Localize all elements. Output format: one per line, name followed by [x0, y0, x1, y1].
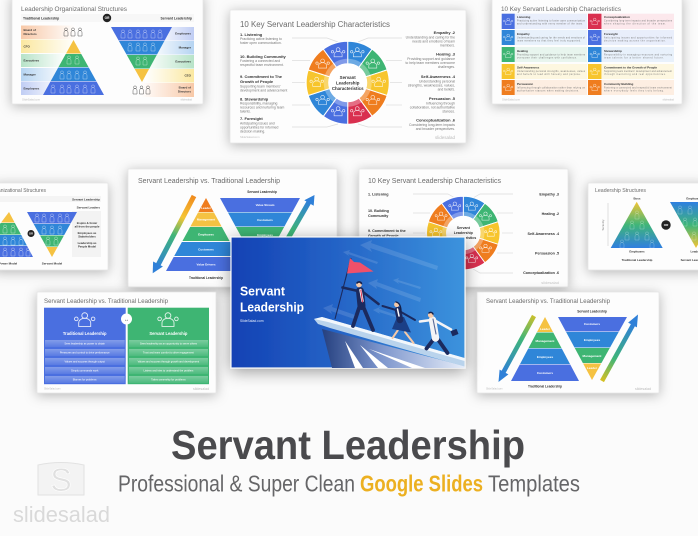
- servant pyramid people: [121, 30, 162, 65]
- slide title: 10 Key Servant Leadership Characteristics: [501, 6, 621, 13]
- traditional pyramid: [511, 317, 579, 381]
- right labels: Empathy .3: [539, 192, 559, 196]
- right arrow: [268, 195, 314, 273]
- servant rows: Values and success through growth and development: [138, 360, 199, 364]
- footer: SlideSalad.com: [44, 388, 61, 390]
- icon: team group: [158, 313, 178, 326]
- right labels: Self-Awareness .4: [528, 232, 560, 236]
- left column rows: Empathy: [517, 32, 530, 36]
- panel: leadership structures slide (middle right, cropped): [588, 183, 698, 270]
- servant rows: [129, 340, 208, 383]
- left characteristics: resources and nurturing team: [240, 106, 284, 110]
- servant pyramid labels: Value Stream: [256, 203, 275, 207]
- right arrow: [602, 314, 638, 381]
- traditional pyramid labels: Employees: [198, 232, 214, 236]
- left column rows: Practicing active listening to foster open communication: [517, 20, 586, 22]
- traditional rows: Sees leadership as power to obtain: [64, 342, 106, 346]
- footer: [240, 135, 455, 140]
- notes panel: Inspire & foster: [77, 221, 98, 225]
- right column rows: Responsibility in managing resources and nurturing: [604, 54, 673, 56]
- servant rows: Trust and team comfort to drive engagement: [143, 350, 194, 354]
- right column rows: when shaping the direction of the team.: [604, 22, 666, 26]
- background arrows: [323, 240, 438, 320]
- traditional pyramid labels: Customers: [537, 371, 553, 375]
- cliff slab: [314, 317, 464, 366]
- notes panel: People Model: [78, 244, 96, 248]
- left characteristics: talents.: [240, 110, 251, 114]
- hero illustration: [314, 240, 464, 368]
- left characteristics: Growth of People: [240, 79, 274, 84]
- servant pyramid: [555, 317, 630, 380]
- donut chart: [422, 191, 505, 275]
- right rows: [140, 27, 194, 97]
- right column rows: decision making across the organization.: [604, 40, 666, 42]
- right column rows: through mentoring and real opportunities.: [604, 73, 666, 76]
- right column rows: [588, 14, 674, 95]
- panel: two column comparison slide (lower left): [37, 292, 216, 393]
- slide title: Servant Leadership vs. Traditional Leadership: [44, 298, 168, 305]
- left column rows: [502, 14, 587, 95]
- left characteristics: Practicing active listening to: [240, 37, 282, 41]
- donut centre label: Leadership: [336, 80, 360, 86]
- traditional heading: Traditional Leadership: [63, 331, 107, 336]
- left characteristics: 9. Commitment to The: [240, 74, 283, 79]
- right column rows: Considering long-term impacts and broader perspectives: [604, 20, 673, 22]
- connector lines: [292, 38, 402, 127]
- right characteristics: Providing support and guidance: [407, 57, 455, 61]
- OR badge: OR: [29, 232, 33, 236]
- left column rows: Providing support and guidance to help team members: [517, 54, 586, 56]
- right characteristics: Conceptualization .6: [416, 118, 456, 122]
- labels: Boss: [633, 196, 641, 200]
- slide title: Servant Leadership vs. Traditional Leadership: [138, 178, 280, 185]
- right characteristics: Self-Awareness .4: [421, 74, 456, 79]
- servant pyramid labels: Employees: [257, 233, 273, 237]
- traditional rows: Simply commands work: [71, 368, 99, 372]
- left labels: [368, 192, 406, 238]
- right column rows: Fostering a connected and respectful team environment: [604, 86, 672, 90]
- traditional pyramid labels: Employees: [537, 355, 553, 359]
- slide title: Leadership Organizational Structures: [21, 6, 127, 13]
- footer: SlideSalad.com: [22, 98, 40, 102]
- left characteristics: opportunities for informed: [240, 126, 279, 130]
- servant rows: Listens and tries to understand the problem: [143, 368, 193, 372]
- footer: [44, 387, 209, 391]
- hero title: [240, 284, 304, 314]
- left pyramid: [0, 212, 33, 257]
- traditional pyramid labels: [536, 327, 554, 375]
- right characteristics: Understanding and caring for the: [406, 36, 455, 40]
- slide title: 10 Key Servant Leadership Characteristics: [368, 178, 501, 185]
- traditional rows: Blames for problems: [73, 378, 97, 382]
- donut centre label: Servant: [457, 226, 471, 230]
- left labels: 9. Commitment to the: [368, 229, 406, 233]
- footer: SlideSalad.com: [240, 135, 260, 139]
- left column rows: Healing: [517, 49, 528, 53]
- traditional rows: Values and success through output: [65, 360, 105, 364]
- panel: servant vs traditional slide (lower right): [477, 292, 659, 393]
- right column rows: Foresight: [604, 32, 618, 36]
- board icons: [64, 28, 150, 94]
- footer: slidesalad: [435, 135, 455, 140]
- footer: slidesalad: [635, 387, 651, 391]
- donut centre label: Characteristics: [332, 86, 364, 91]
- right column rows: Supporting team members' development and advancement: [604, 70, 672, 73]
- right characteristics: and broader perspectives.: [416, 127, 455, 131]
- footer: SlideSalad.com: [502, 98, 520, 102]
- left characteristics: 8. Stewardship: [240, 96, 269, 102]
- left labels: 10. Building: [368, 209, 389, 213]
- left column rows: Understanding and caring for the needs and emotions of: [517, 36, 585, 40]
- subtitle: [118, 470, 580, 496]
- slide title: 10 Key Servant Leadership Characteristics: [240, 20, 390, 29]
- donut centre label: Servant: [340, 75, 356, 80]
- right column rows: Conceptualization: [604, 15, 630, 19]
- subtitle: Templates: [488, 470, 580, 496]
- right column rows: Commitment to the Growth of People: [604, 66, 657, 70]
- notes panel: Stakeholders: [78, 234, 96, 238]
- right characteristics: challenges.: [438, 65, 455, 69]
- right characteristics: Empathy .2: [434, 30, 456, 35]
- right characteristics: collaboration, not authoritative: [410, 106, 455, 110]
- OR badge: OR: [105, 16, 110, 20]
- hero title: Leadership: [240, 300, 304, 314]
- model labels: [0, 262, 62, 266]
- right characteristics: Understanding personal: [419, 80, 455, 84]
- panel: characteristics table slide (top right): [492, 0, 682, 104]
- traditional pyramid: [166, 198, 230, 271]
- traditional rows: Pressures and control to drive performance: [60, 350, 110, 354]
- left characteristics: Supporting team members': [240, 84, 281, 88]
- panel: leadership organizational structures slide (top left): [12, 0, 203, 104]
- traditional pyramid: [43, 40, 104, 95]
- footer: [22, 98, 193, 102]
- left column rows: Self-Awareness: [517, 66, 540, 70]
- donut centre label: [332, 75, 364, 91]
- traditional pyramid labels: Customers: [198, 248, 214, 252]
- traditional pyramid people: [51, 56, 95, 93]
- panel: hero cover slide: [231, 237, 465, 368]
- left rows: CFO: [24, 44, 30, 48]
- right characteristics: stances.: [442, 110, 455, 114]
- right column rows: Anticipating issues and opportunities for informed: [604, 36, 673, 40]
- right column rows: Stewardship: [604, 49, 622, 53]
- left column rows: Listening: [517, 15, 531, 19]
- connector lines: [413, 194, 513, 273]
- left column rows: overcome their challenges with confidence.: [517, 56, 577, 60]
- panel: 10 key characteristics slide (top centre): [230, 10, 466, 143]
- right labels: Healing .2: [542, 212, 559, 216]
- donut centre label: [450, 226, 476, 240]
- traditional column: [44, 308, 126, 384]
- footer: slidesalad: [662, 98, 675, 102]
- flag: [335, 258, 374, 319]
- right characteristics: and beliefs.: [438, 88, 455, 92]
- right characteristics: strengths, weaknesses, values,: [408, 84, 455, 88]
- slide title: Servant Leadership vs. Traditional Leadership: [486, 298, 610, 305]
- footer mark: slidesalad: [541, 280, 559, 285]
- footer: slidesalad: [193, 387, 209, 391]
- left column rows: and understanding with every member of the team.: [517, 22, 583, 26]
- left column rows: and beliefs to lead with honesty and purpose.: [517, 73, 581, 76]
- cliff rock: [322, 329, 464, 368]
- footer: slidesalad: [180, 98, 193, 102]
- right labels: Conceptualization .6: [523, 271, 559, 275]
- notes panel: Leadership as: [78, 241, 97, 245]
- right column rows: Community Building: [604, 82, 633, 86]
- left characteristics: Anticipating issues and: [240, 122, 275, 126]
- hero title: Servant: [240, 284, 286, 298]
- notes panel: Employees as: [78, 231, 97, 235]
- axis labels: [528, 310, 607, 388]
- logo: slidesalad: [13, 462, 110, 527]
- slide title: Leadership Structures: [595, 188, 647, 194]
- OR badge: OR: [664, 223, 669, 227]
- left rows: Directors: [24, 32, 37, 36]
- OR badge: [28, 230, 34, 237]
- servant rows: Takes ownership for problems: [151, 378, 186, 382]
- left characteristics: respectful team environment.: [240, 63, 284, 67]
- right characteristics: to help team members overcome: [405, 61, 455, 65]
- left characteristics: 10. Building Community: [240, 54, 287, 59]
- labels: Employees: [629, 250, 645, 254]
- right rows: CEO: [184, 74, 192, 78]
- hero site label: SlideSalad.com: [240, 319, 264, 323]
- traditional pyramid labels: Management: [536, 339, 554, 343]
- model labels: Servant Model: [42, 262, 62, 266]
- labels: [622, 196, 698, 262]
- left characteristics: foster open communication.: [240, 41, 282, 45]
- main title: Servant Leadership: [171, 422, 525, 468]
- header band: [0, 196, 101, 210]
- right characteristics: [405, 30, 456, 131]
- traditional pyramid labels: Value Drivers: [196, 262, 216, 266]
- third figure: [420, 312, 451, 353]
- left column rows: Influencing through collaboration rather than relying on: [517, 86, 586, 90]
- axis labels: Traditional Leadership: [189, 276, 223, 280]
- traditional pyramid labels: Leader: [540, 327, 551, 331]
- right column rows: where everybody feels they truly belong.: [604, 90, 664, 92]
- right rows: Board of: [179, 86, 191, 90]
- servant rows: Sees leadership as an opportunity to serve others: [140, 342, 198, 346]
- servant pyramid labels: Customers: [257, 218, 273, 222]
- left column rows: Understanding personal strengths, weaknesses, values: [517, 70, 586, 73]
- left characteristics: development and advancement: [240, 88, 287, 92]
- left characteristics: Fostering a connected and: [240, 59, 280, 63]
- right labels: Persuasion .5: [535, 252, 559, 256]
- right rows: Directors: [178, 90, 191, 94]
- left characteristics: Responsibility, managing: [240, 102, 278, 106]
- axis labels: [189, 190, 277, 280]
- labels: Traditional Leadership: [622, 258, 653, 262]
- traditional pyramid labels: [196, 206, 216, 266]
- axis labels: Servant Leadership: [577, 310, 607, 314]
- left labels: Community: [368, 214, 389, 218]
- right characteristics: members.: [440, 44, 455, 48]
- right rows: Employees: [175, 32, 191, 36]
- subtitle: Professional & Super Clean: [118, 470, 355, 496]
- right characteristics: Healing .3: [436, 52, 456, 56]
- servant pyramid labels: [256, 203, 275, 237]
- servant pyramid: [220, 198, 300, 236]
- notes panel: [72, 211, 101, 257]
- servant triangle: [670, 202, 698, 248]
- left column rows: Persuasion: [517, 82, 533, 86]
- triangle people: [620, 206, 697, 248]
- servant pyramid: [111, 27, 172, 82]
- icon: leader group: [74, 313, 95, 326]
- subtitle: Google Slides: [360, 470, 483, 496]
- left arrow: [153, 196, 194, 273]
- donut centre label: Characteristics: [450, 236, 476, 240]
- right characteristics: Persuasion .5: [429, 96, 456, 101]
- right labels: [523, 192, 560, 275]
- footer: [502, 98, 675, 102]
- icon: compare badge: [121, 314, 132, 324]
- left rows: Executives: [24, 58, 40, 62]
- servant pyramid labels: [583, 322, 601, 370]
- column headers: Traditional Leadership: [23, 16, 59, 20]
- OR badge: [103, 14, 111, 22]
- left rows: Board of: [24, 28, 36, 32]
- left labels: 1. Listening: [368, 192, 388, 196]
- left pyramid people: [3, 225, 30, 256]
- panel: 10 key characteristics slide (middle centre-right): [359, 169, 568, 287]
- traditional rows: [45, 340, 125, 383]
- right rows: Manager: [179, 46, 192, 50]
- left column rows: authoritative stances when making decisions.: [517, 90, 579, 92]
- column headers: [21, 14, 194, 22]
- cliff facets: [345, 341, 425, 368]
- donut centre label: Leadership: [454, 231, 474, 235]
- servant pyramid labels: Employees: [584, 338, 600, 342]
- right characteristics: Influencing through: [426, 102, 455, 106]
- leader figure: [342, 282, 378, 330]
- panel: organizational structures slide (middle left, cropped): [0, 183, 108, 270]
- right characteristics: needs and emotions of team: [412, 40, 455, 44]
- servant pyramid labels: Leader: [587, 366, 598, 370]
- panel: servant vs traditional slide (middle centre-left): [128, 169, 337, 287]
- right rows: Executives: [175, 60, 191, 64]
- left characteristics: [240, 32, 287, 134]
- left characteristics: 1. Listening: [240, 32, 263, 37]
- servant pyramid labels: Management: [583, 354, 601, 358]
- traditional pyramid labels: Leader: [201, 206, 212, 210]
- axis labels: Traditional Leadership: [528, 384, 562, 388]
- left rows: Manager: [24, 72, 37, 76]
- left column rows: team members so that they feel truly supported.: [517, 40, 581, 42]
- icon: compare badge: ↔: [124, 317, 129, 323]
- right characteristics: Considering long-term impacts: [409, 123, 455, 127]
- servant heading: Servant Leadership: [149, 331, 188, 336]
- logo wordmark: slidesalad: [13, 502, 110, 527]
- right pyramid people: [35, 214, 69, 245]
- left characteristics: 7. Foresight: [240, 116, 263, 121]
- vertical axis: Seniority: [601, 219, 605, 230]
- header band: Servant Leadership: [72, 198, 100, 202]
- header band: Servant Leaders: [77, 206, 100, 210]
- axis labels: Servant Leadership: [247, 190, 277, 194]
- notes panel: all from the people: [75, 224, 100, 228]
- servant pyramid labels: Customers: [584, 322, 600, 326]
- left arrow: [498, 316, 534, 382]
- donut chart: [301, 35, 395, 131]
- column headers: Servant Leadership: [161, 16, 192, 20]
- right column rows: team talents for a better shared future.: [604, 56, 664, 60]
- footer: [486, 387, 651, 391]
- logo mark: S: [50, 462, 72, 498]
- left rows: [21, 26, 76, 95]
- icon: briefcase: [450, 329, 459, 336]
- left characteristics: decision making.: [240, 130, 265, 134]
- traditional triangle: [611, 202, 663, 248]
- servant column: [128, 308, 209, 384]
- footer: SlideSalad.com: [486, 388, 503, 390]
- traditional pyramid labels: Management: [197, 218, 215, 222]
- right pyramid: [25, 212, 80, 257]
- second figure: [382, 302, 415, 343]
- left rows: Employees: [24, 86, 40, 90]
- left labels: Growth of People: [368, 234, 399, 238]
